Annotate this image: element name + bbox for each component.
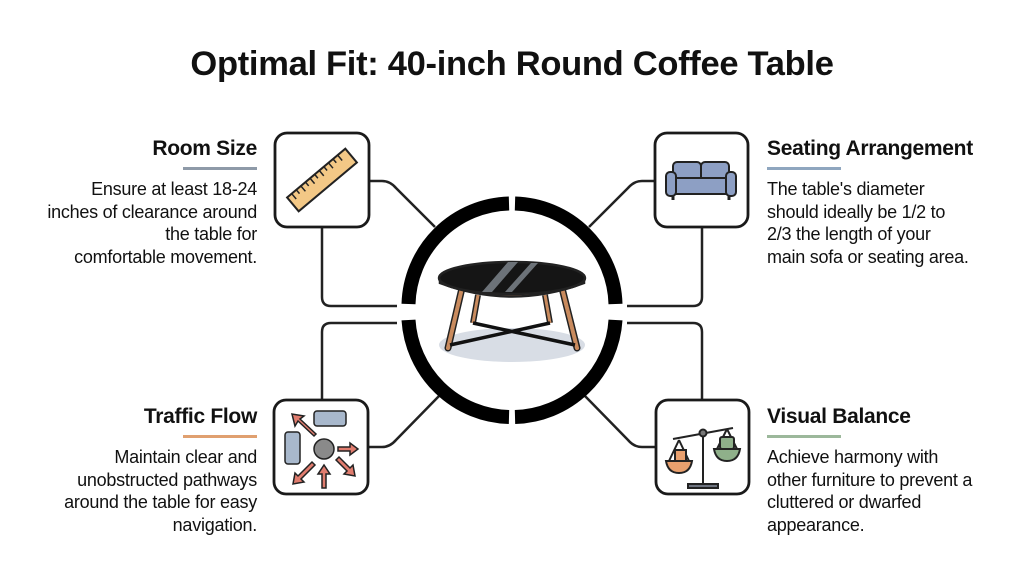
panel: traffic flow: unobstructed pathways [77, 470, 257, 490]
ring [408, 204, 616, 417]
panel: seating arrangement: 2/3 the length of your [767, 224, 931, 244]
panel: visual balance: cluttered or dwarfed [767, 492, 921, 512]
panel: visual balance: other furniture to prevent a [767, 470, 972, 490]
panel: visual balance: Visual Balance [767, 405, 911, 428]
panel: visual balance: Achieve harmony with [767, 447, 938, 467]
icon: traffic flow [285, 411, 358, 488]
panel: room size: inches of clearance around [47, 202, 257, 222]
panel: room size: Room Size [152, 137, 257, 160]
panel: traffic flow [64, 405, 258, 535]
title: Optimal Fit: 40-inch Round Coffee Table [190, 45, 834, 83]
panel: seating arrangement: Seating Arrangement [767, 137, 973, 160]
panel: visual balance: appearance. [767, 515, 864, 535]
panel: room size: comfortable movement. [74, 247, 257, 267]
panel: seating arrangement: should ideally be 1/2 to [767, 202, 945, 222]
panel: seating arrangement [767, 137, 973, 267]
icon boxes [274, 133, 749, 494]
icon: ruler [287, 149, 357, 211]
panel: visual balance [767, 405, 972, 535]
connectors [322, 181, 702, 447]
panel: room size: the table for [165, 224, 257, 244]
panel: seating arrangement: The table's diameter [767, 179, 925, 199]
panel: room size [47, 137, 257, 267]
panel: seating arrangement: main sofa or seating area. [767, 247, 969, 267]
panel: traffic flow: around the table for easy [64, 492, 257, 512]
panel: room size: Ensure at least 18-24 [91, 179, 257, 199]
panel: traffic flow: navigation. [173, 515, 257, 535]
panel: traffic flow: Traffic Flow [144, 405, 257, 428]
icon: balance scale [666, 428, 740, 488]
panel: traffic flow: Maintain clear and [114, 447, 257, 467]
icon: coffee table [439, 262, 585, 362]
icon: sofa [666, 162, 736, 200]
